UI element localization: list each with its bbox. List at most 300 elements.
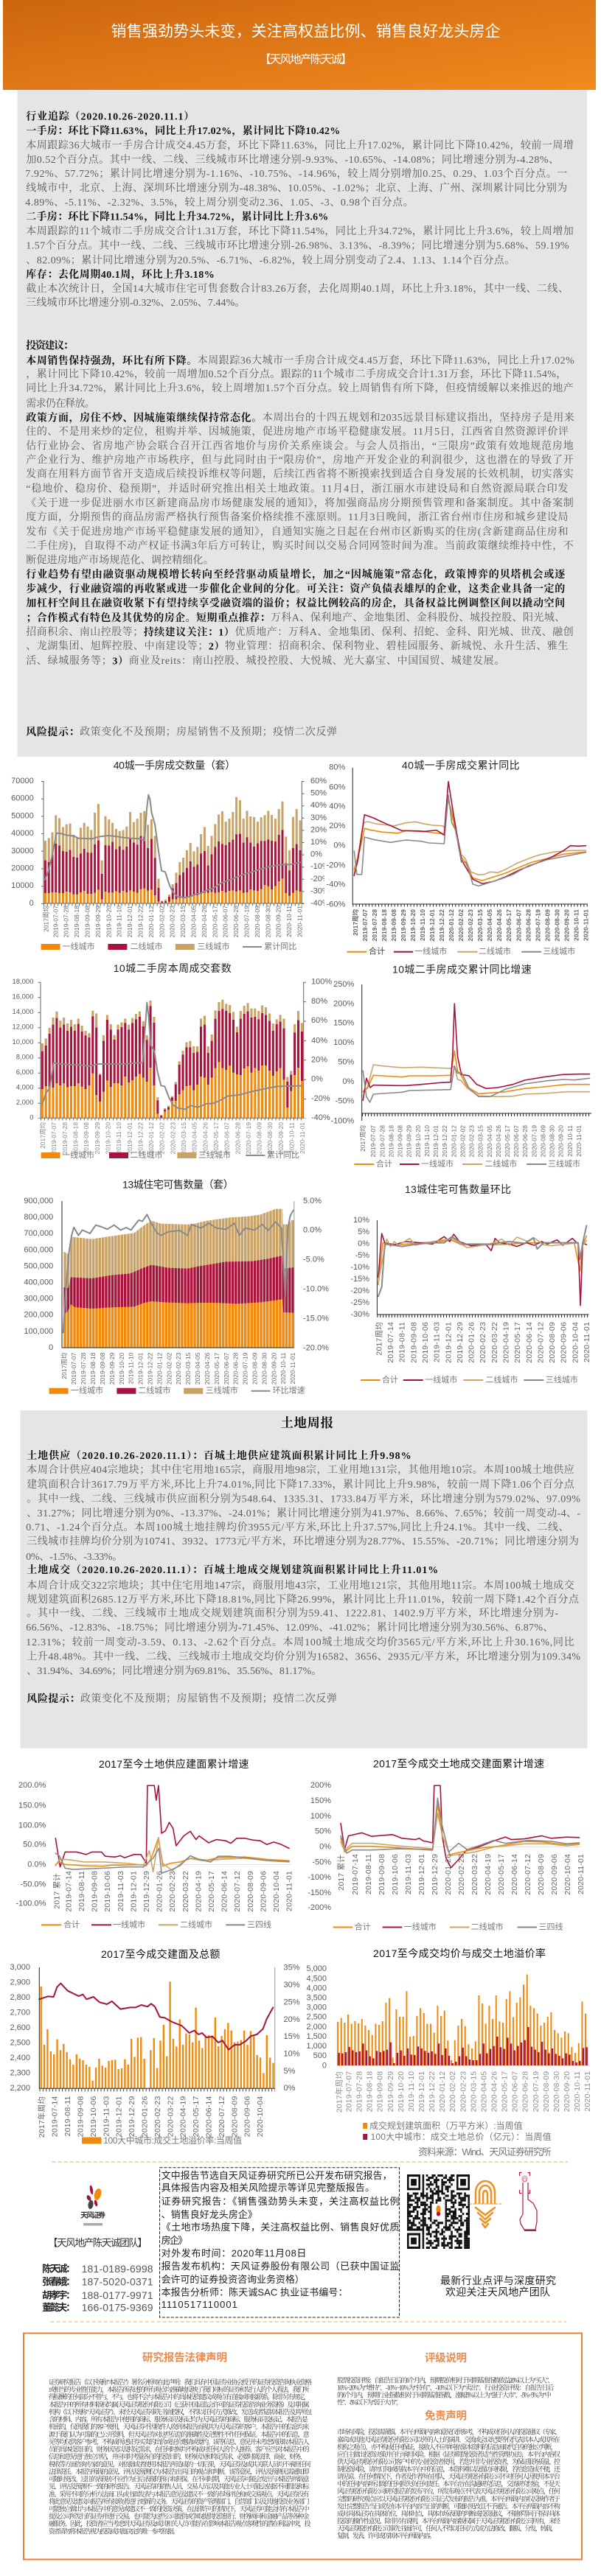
panel: legal statements	[24, 2333, 582, 2560]
axis labels: 70000	[11, 777, 34, 785]
legend: 环比增速	[273, 1385, 305, 1396]
x axis labels: 2020-08-30	[549, 1125, 556, 1157]
axis labels: 50.0%	[23, 1840, 46, 1849]
legend	[347, 946, 575, 956]
axis labels	[12, 977, 332, 1122]
x axis labels: 2019-07-14	[386, 1322, 395, 1363]
x axis labels: 2019-08-18	[387, 1125, 395, 1157]
axis labels: 14,000	[12, 1008, 34, 1016]
axis labels: 3,000	[10, 1963, 30, 1972]
x axis labels: 2020-08-09	[254, 906, 261, 937]
axis labels: 2,600	[10, 2023, 30, 2032]
text block: legal statement: 或相当的专业胜任能力，本报告所表述的所有观点均准确地反映了我们对标的证券和发行人的个人看法。我们所	[49, 2385, 310, 2394]
x axis labels: 2019-09-08	[91, 1871, 100, 1912]
x axis labels: 2020-09-20	[270, 1352, 277, 1385]
legend	[49, 1385, 305, 1396]
x axis labels: 2019-10-06	[391, 1854, 400, 1895]
lines	[341, 1785, 581, 1868]
x axis labels: 2019-08-11	[77, 1871, 86, 1911]
x axis labels: 2017周均	[42, 906, 49, 932]
text block: land supply	[26, 1449, 580, 1563]
logo: Tianfeng Securities: 天风证券	[80, 2211, 105, 2220]
x axis labels: 2020-02-23	[175, 1352, 182, 1385]
x axis labels: 2019-12-22	[438, 909, 445, 941]
x axis labels: 2020-08-09	[230, 2096, 239, 2137]
x axis labels: 2020-05-17	[513, 1322, 522, 1363]
axis labels: 18,000	[12, 978, 34, 986]
axis labels: 200.0%	[18, 1781, 46, 1790]
x axis labels: 2020-09-20	[563, 909, 570, 941]
x axis labels: 2019-09-08	[99, 1352, 106, 1385]
x axis labels: 2020-01-12	[448, 909, 455, 941]
axis labels: 10%	[310, 838, 327, 847]
paired bars	[337, 1975, 589, 2065]
axis labels: 700,000	[24, 1229, 53, 1238]
x axis labels: 2019-12-01	[417, 2071, 426, 2112]
x axis labels: 2020-03-15	[184, 1352, 192, 1385]
x axis labels: 2019-08-18	[89, 1352, 97, 1385]
x axis labels: 2019-07-14	[351, 1854, 360, 1895]
legend	[333, 1922, 563, 1932]
x axis labels: 2020-07-19	[243, 906, 251, 937]
axis labels: 300,000	[24, 1295, 53, 1303]
follow call-to-action: 最新行业点评与深度研究	[440, 2275, 556, 2286]
text block: land transactions: 66.56%、-12.83%、-18.75%；同比增速分别为-71.45%、12.09%、-41.02%；累计同比增速分别为30.56%、6.87%、	[26, 1621, 553, 1634]
x axis labels: 2019-09-29	[386, 2071, 395, 2112]
legend: 一线城市	[113, 1919, 145, 1929]
text block: land transactions: 上升48.48%。其中一线、二线、三线城市土地成交均价分别为16582、3656、2935元/平方米，环比增速分别为109.34%	[27, 1651, 580, 1662]
x axis labels: 2019-09-08	[83, 1122, 90, 1154]
x axis labels: 2020-08-30	[266, 1122, 274, 1154]
axis labels: 10%	[283, 2050, 300, 2059]
axis labels: 25%	[283, 1998, 300, 2007]
legend: 合计	[382, 1374, 398, 1385]
text block: legal statement: 可随时更改。过往的表现亦不应作为日后表现的预示和担保。在不同时期，天风证券可能会发出与本报告所载意	[49, 2474, 310, 2483]
text block: disclaimer: 中的任何内容所引致的任何损失负任何责任。本平台旨在沟通研究信息，交流研究经验，不是天	[337, 2479, 560, 2488]
text block: disclaimer: 完整的研究观点应以天风证券股份有限公司正式发布的报告为准。本平台所载内容仅反映作者于	[337, 2494, 560, 2502]
x axis labels: 2019-07-07	[345, 2071, 354, 2112]
axis labels: 30000	[11, 847, 34, 855]
x axis labels: 2020-02-23	[169, 1122, 176, 1154]
legend: 一线城市	[63, 941, 95, 951]
x axis labels: 2020-11-01	[296, 906, 304, 937]
axis labels: 20%	[329, 822, 346, 830]
inventory change line	[63, 1211, 293, 1332]
chart: land transaction cumulative growth	[308, 1758, 586, 1932]
legend	[41, 1149, 299, 1160]
text block: industry tracking: 线城市中，北京、上海、深圳环比增速分别为-48.38%、10.05%、-1.02%；北京、上海、广州、深圳累计同比分别为	[26, 181, 567, 195]
text block: investment advice: 政策方面，房住不炒、因城施策继续保持常态化。本周出台的十四五规划和2035远景目标建议指出，坚持房子是用来	[26, 411, 574, 424]
heading: rating explanation: 评级说明	[425, 2351, 467, 2365]
x axis labels: 2019-09-08	[378, 1854, 386, 1895]
axis labels: 0%	[342, 1077, 355, 1086]
x axis labels: 2019-09-08	[77, 2096, 86, 2137]
x axis labels: 2019-11-03	[433, 1322, 442, 1362]
legend: 二线城市	[479, 946, 511, 956]
x axis labels: 2020-05-17	[497, 1854, 506, 1895]
chart: 10 city resale cumulative growth	[331, 964, 591, 1169]
text block: disclaimer: 发出完整报告当日或发布本平台内容当日的判断，可随时更改且不予通告。本平台所载内容不构	[337, 2502, 560, 2510]
axis labels: 0%	[311, 1074, 323, 1083]
report disclosure box: 本报告分析师：陈天诚SAC 执业证书编号：	[161, 2287, 348, 2297]
x axis labels: 2020-09-20	[557, 1125, 565, 1157]
axis labels: 3,000	[306, 2003, 327, 2012]
text block: land transactions: 、31.94%、34.69%；同比增速分别为69.81%、35.56%、81.17%。	[27, 1665, 322, 1677]
chart title: 40城一手房成交数量（套）	[114, 759, 235, 771]
axis labels: -30%	[310, 886, 330, 895]
x axis labels: 2020-01-26	[156, 1871, 164, 1912]
heading: legal statement: 研究报告法律声明	[142, 2351, 227, 2365]
axis labels	[306, 1964, 327, 2070]
stacked bars	[44, 797, 302, 903]
x axis labels: 2020-04-05	[486, 1125, 493, 1157]
axis labels: -5%	[355, 1251, 369, 1260]
team contacts: 188-0177-9971	[82, 2289, 153, 2301]
x axis labels: 2020-06-07	[222, 906, 229, 937]
x axis labels: 2019-09-29	[94, 906, 102, 937]
x axis labels: 2019-08-18	[381, 909, 388, 941]
axis labels: 2,800	[10, 1993, 30, 2002]
x axis labels: 2020-10-11	[566, 1125, 574, 1157]
x axis labels: 2017周均	[60, 1353, 68, 1379]
text block: land supply: 。其中一线、二线、三线城市供应面积分别为548.64、1335.31、1733.84万平方米，环比增速分别为579.02%、97.09%	[27, 1493, 580, 1505]
x axis labels: 2019-12-22	[441, 1125, 448, 1157]
legend: 合计	[369, 946, 385, 956]
axis labels: 10%	[353, 1216, 369, 1225]
x axis labels: 2020-05-17	[501, 2071, 510, 2112]
x axis labels: 2019-08-18	[73, 906, 80, 937]
x axis labels: 2020-11-01	[583, 2071, 592, 2112]
axis labels: -50%	[336, 1097, 355, 1106]
x axis labels: 2020-11-01	[575, 1125, 583, 1157]
axis labels: 4,000	[16, 1084, 34, 1092]
axis labels: -100%	[331, 1116, 355, 1125]
axis labels: 20%	[310, 825, 327, 834]
x axis labels: 2020-09-06	[259, 1871, 268, 1912]
x axis labels: 2020-08-09	[548, 1322, 557, 1363]
chart title: 2017至今成交建面及总额	[101, 1948, 220, 1960]
axis labels: 200%	[310, 1781, 331, 1790]
axis labels: 100,000	[24, 1327, 53, 1336]
text block: legal statement: 源于我们认为可靠的已公开资料，但天风证券对这些信息的准确性及完整性不作任何保证。本报告中的信息、意	[49, 2430, 310, 2439]
team contacts: 张春娥：	[42, 2276, 75, 2287]
axis labels: 2,400	[10, 2054, 30, 2062]
x axis labels: 2019-07-28	[355, 2071, 364, 2112]
x axis labels	[336, 1854, 586, 1895]
x axis labels: 2020-01-26	[468, 1322, 476, 1363]
axis labels: 500,000	[24, 1261, 53, 1270]
axis labels: 80%	[329, 763, 346, 772]
x axis labels: 2020-04-26	[496, 909, 503, 941]
legend: 三四线	[247, 1919, 271, 1929]
team contacts: 陈天诚：	[42, 2264, 75, 2274]
axis labels: 2,200	[10, 2084, 30, 2093]
x axis labels: 2020-02-02	[159, 1122, 166, 1154]
legend: 累计同比	[264, 942, 296, 951]
x axis labels: 2020-08-09	[542, 2071, 551, 2112]
x axis labels: 2020-04-26	[204, 1352, 211, 1385]
x axis labels: 2020-04-19	[484, 1854, 493, 1895]
text block: legal statement: 含的材料、内容。所有本报告中使用的商标、服务标识及标记均为天风证券的商标、服务标识及标记。本报告是	[49, 2415, 308, 2423]
axis labels: 0	[322, 2061, 327, 2070]
x axis labels: 2020-11-01	[583, 909, 590, 941]
x axis labels: 2017年周均	[335, 2071, 344, 2113]
x axis labels: 2019-07-07	[52, 906, 59, 937]
bars	[40, 1981, 275, 2088]
x axis labels: 2020-04-26	[490, 2071, 498, 2112]
axis labels: -40%	[311, 1113, 330, 1122]
axis labels	[11, 777, 330, 908]
x axis labels: 2019-12-01	[126, 1122, 133, 1154]
axis labels: 50000	[11, 811, 34, 820]
text block: rating explanation: 的6个月内，预期行业指数相对于同期基准指数，涨幅5%以上为“强于大市”、-5%~5%为“中	[337, 2391, 552, 2400]
x axis labels: 2020-08-09	[256, 1122, 263, 1154]
x axis labels: 2020-06-14	[525, 1322, 534, 1363]
x axis labels: 2020-04-26	[495, 1125, 502, 1157]
x axis labels: 2019-10-06	[89, 2096, 98, 2137]
text block: disclaimer	[337, 2428, 561, 2540]
axis labels: 400,000	[24, 1278, 53, 1287]
x axis labels: 2019-10-20	[414, 1125, 422, 1157]
legend: 二线城市	[485, 1374, 518, 1385]
x axis labels: 2019-12-01	[428, 909, 436, 941]
x axis labels: 2020-09-06	[550, 1854, 559, 1895]
x axis labels: 2019-12-01	[417, 1854, 426, 1895]
legend: 三四线	[538, 1922, 563, 1932]
x axis labels: 2020-10-04	[272, 1871, 281, 1912]
text block: land supply: 、31.27%；同比增速分别为0%、-13.37%、-24.01%；累计同比增速分别为41.97%、8.66%、7.65%；较前一周变动-4、-	[27, 1507, 580, 1519]
axis labels: 12,000	[12, 1023, 34, 1032]
cumulative line	[42, 1003, 302, 1109]
x axis labels: 2020-03-15	[476, 909, 484, 941]
axis labels	[327, 763, 346, 909]
x axis labels: 2020-06-28	[232, 1352, 240, 1385]
report disclosure box: 会许可的证券投资咨询业务资格）	[161, 2274, 305, 2285]
icon: hand pressing	[519, 2172, 537, 2230]
axis labels: 20%	[283, 2015, 300, 2024]
header banner: 销售强劲势头未变，关注高权益比例、销售良好龙头房企	[111, 24, 501, 40]
x axis labels: 2020-06-07	[511, 2071, 520, 2112]
x axis labels: 2020-05-17	[505, 909, 513, 941]
axis labels: 0.0%	[27, 1860, 46, 1869]
x axis labels: 2020-08-30	[552, 2071, 561, 2112]
x axis labels: 2020-10-11	[285, 906, 293, 937]
legend: 三线城市	[197, 941, 229, 951]
axis labels: 250%	[333, 980, 355, 989]
chart title: 10城二手房本周成交套数	[114, 962, 232, 974]
x axis labels: 2020-06-28	[521, 1125, 529, 1157]
panel: industry tracking and investment advice	[17, 90, 587, 757]
chart: average price and land value	[306, 1947, 592, 2142]
x axis labels: 2020-08-30	[260, 1352, 268, 1385]
text block: disclaimer: 制投资风险，请勿订阅或转载本平台中的信息，本资料难以设置访问权限，若给您造成不便，还	[337, 2465, 561, 2474]
x axis labels: 2020-10-11	[572, 909, 580, 941]
axis labels: -50%	[312, 1858, 331, 1866]
lines	[55, 1785, 291, 1873]
text block: investment advice: ；合作模式有特色及其优势的房企。短期重点推荐：万科A、保利地产、金地集团、金科股份、城投控股、阳光城、	[26, 612, 565, 623]
axis labels: -20%	[310, 875, 330, 883]
x axis labels: 2019-07-07	[369, 1125, 377, 1157]
text block: industry tracking: 截止本次统计日，全国14大城市住宅可售套数合计83.26万套，去化周期40.1周，环比上升3.18%，其中一线、二线、	[26, 282, 569, 295]
axis labels: 50%	[310, 789, 327, 798]
x axis labels: 2020-05-17	[213, 1352, 220, 1385]
x axis labels: 2019-11-03	[117, 1871, 125, 1911]
text block: rating explanation	[337, 2376, 554, 2407]
x axis labels: 2019-12-22	[137, 906, 145, 937]
text block: disclaimer: 应自主做出投资决策并自行承担风险。根据《证券期货投资者适当性管理办法》，本平台内容仅	[337, 2450, 560, 2459]
x axis labels: 2020-08-09	[540, 1125, 547, 1157]
x axis labels: 2020-11-01	[285, 1871, 294, 1911]
report disclosure box: 对外发布时间：2020年11月08日	[161, 2247, 306, 2259]
axis labels: -20%	[327, 861, 346, 869]
text block: investment advice: 步减少，行业融资端的再收紧或进一步催化企业间的分化。可关注：资产负债表雄厚的企业，这类企业具备一定的	[26, 582, 565, 595]
x axis labels: 2020-01-12	[147, 906, 155, 937]
x axis labels: 2019-12-22	[136, 1122, 144, 1154]
x axis labels: 2017周均	[375, 1322, 383, 1356]
chart title: 40城一手房成交累计同比	[402, 760, 520, 771]
legend: 合计	[376, 1158, 392, 1169]
axis labels: -200%	[308, 1903, 331, 1912]
x axis labels: 2019-10-20	[118, 1352, 125, 1385]
text block: industry tracking: 行业追踪（2020.10.26-2020.11.1）	[26, 111, 194, 122]
x axis labels: 2019-07-14	[64, 1871, 73, 1912]
text block: legal statement: 得报酬的任何部分不曾与，不与，也将不会与本报告中的具体投资建议或观点有直接或间接联系。除非另有规定，	[49, 2393, 310, 2401]
axis labels: 5%	[283, 2067, 296, 2076]
report disclosure box: 具体报告内容及相关风险提示等详见完整版报告。	[161, 2183, 375, 2193]
report disclosure box: 1110517110001	[161, 2299, 237, 2310]
text block: land supply: 0%、-1.5%、-3.33%。	[26, 1552, 122, 1563]
x axis labels: 2020-07-19	[245, 1122, 252, 1154]
chart title: 2017至今土地供应建面累计增速	[99, 1758, 249, 1770]
legend: 累计同比	[267, 1150, 299, 1160]
axis labels: 10000	[11, 881, 34, 890]
x axis labels: 2019-10-20	[105, 906, 112, 937]
text block: industry tracking: 本周跟踪36大城市一手房合计成交4.45万套，环比下降11.63%，同比上升17.02%，累计同比下降10.42%，较前一周增	[26, 139, 574, 152]
axis labels: 500	[313, 2051, 327, 2060]
x axis labels: 2020-01-12	[450, 1125, 457, 1157]
axis labels: 2,000	[306, 2023, 327, 2031]
axis labels: 40%	[310, 801, 327, 810]
x axis labels: 2020-09-20	[563, 2071, 572, 2112]
text block: industry tracking: 本周跟踪的11个城市二手房成交合计1.31万套，环比下降11.54%，同比上升34.72%，累计同比上升3.6%，较上周增加	[26, 225, 574, 237]
axis labels: -15.0%	[303, 1315, 329, 1323]
axis labels	[331, 980, 355, 1125]
x axis labels: 2020-01-26	[444, 1854, 453, 1895]
x axis labels: 2020-03-15	[180, 1122, 187, 1154]
x axis labels: 2020-11-01	[577, 1854, 586, 1894]
text block: disclaimer: 市场有风险，投资需谨慎。本平台所载内容和意见仅供参考，不构成对任何人的投资建议（专家、	[337, 2428, 561, 2437]
text block: investment advice: 行业趋势有望由融资驱动规模增长转向至经营驱动质量增长，加之“因城施策”常态化，政策博弈的贝塔机会或逐	[26, 568, 566, 581]
text block: investment advice: 同比上升34.72%，累计同比上升3.6%，较上周增加1.57个百分点。较上周销售有所下降，但疫情缓解以来推迟的地产	[26, 382, 574, 394]
report disclosure box	[159, 2168, 400, 2317]
legend: 成交规划建筑面积（万平方米）:当周值	[369, 2120, 523, 2131]
text block: risk warning: 风险提示：政策变化不及预期；房屋销售不及预期；疫情二次反弹	[26, 725, 337, 738]
legend	[354, 1158, 580, 1169]
axis labels: 6,000	[16, 1068, 34, 1077]
x axis labels: 2020-09-06	[560, 1322, 569, 1363]
axis labels: 0%	[333, 841, 346, 850]
text block: land supply: 建筑面积合计3617.79万平方米,环比上升74.01%,同比下降17.33%，累计同比上升9.98%，较前一周下降1.06个百分点	[27, 1478, 575, 1491]
x axis labels: 2020-07-19	[530, 1125, 538, 1157]
x axis labels: 2020-06-28	[234, 1122, 241, 1154]
axis labels: -10.0%	[303, 1285, 329, 1294]
axis labels	[308, 1781, 331, 1912]
x axis labels	[37, 2096, 265, 2138]
QR code	[407, 2174, 470, 2249]
text block: disclaimer: 投资的操作性意见。除非另有说明，本平台所载内容版权属于天风证券股份有限公司所有，未经	[337, 2517, 560, 2526]
x axis labels: 2020-04-05	[194, 1352, 201, 1385]
axis labels: 800,000	[24, 1213, 53, 1222]
text block: investment advice: 投资建议：	[26, 339, 74, 352]
axis labels: 150.0%	[18, 1801, 46, 1810]
chart title: 10城二手房成交累计同比增速	[392, 964, 532, 976]
heading: disclaimer: 免责声明	[425, 2409, 467, 2422]
axis labels: 15%	[283, 2032, 300, 2041]
x axis labels: 2020-03-15	[179, 906, 187, 937]
x axis labels: 2019-07-28	[378, 1125, 386, 1157]
axis labels: 40%	[329, 802, 346, 811]
x axis labels: 2020-08-09	[251, 1352, 258, 1385]
text block: land supply: 土地供应（2020.10.26-2020.11.1）：百城土地供应建筑面积累计同比上升9.98%	[27, 1449, 411, 1462]
axis labels: 0	[49, 1343, 53, 1352]
team contacts: 166-0175-9369	[82, 2302, 153, 2314]
team contacts	[42, 2237, 153, 2314]
report disclosure box: 报告发布机构：天风证券股份有限公司（已获中国证监	[161, 2261, 400, 2272]
x axis labels: 2017周均	[39, 1122, 46, 1149]
x axis labels: 2020-04-19	[501, 1322, 510, 1363]
text block: investment advice: ，累计同比下降10.42%，较前一周增加0.52个百分点。跟踪的11个城市二手房成交合计1.31万套，环比下降11.54%，	[26, 368, 566, 380]
axis labels: 10,000	[12, 1038, 34, 1046]
x axis labels	[39, 1122, 306, 1154]
lines	[354, 782, 586, 886]
x axis labels: 2020-01-26	[140, 2096, 149, 2137]
axis labels: -50.0%	[20, 1880, 46, 1889]
legend: 一线城市	[414, 946, 447, 956]
axis labels: 40%	[311, 1036, 327, 1045]
x axis labels: 2019-10-06	[421, 1322, 430, 1363]
text block: industry tracking: 三线城市环比增速分别-0.32%、2.05%、7.44%。	[26, 296, 245, 309]
x axis labels	[335, 2071, 592, 2113]
text block: investment advice: 发布《关于促进房地产市场平稳健康发展的通知》，自通知实施之日起在台州市区新购买的住房(含新建商品住房和	[26, 525, 569, 538]
follow call-to-action: 欢迎关注天风地产团队	[445, 2286, 550, 2298]
report disclosure box: 、销售良好龙头房企》	[161, 2209, 257, 2220]
text block: legal statement: 资者请勿将本报告视为投资或其他决定的唯一参考依据。	[49, 2527, 179, 2535]
x axis labels: 2020-07-19	[242, 1352, 249, 1385]
x axis labels: 2017 累计	[52, 1873, 61, 1909]
x axis labels: 2020-07-12	[218, 2096, 226, 2137]
x axis labels: 2020-06-07	[513, 1125, 520, 1157]
x axis labels: 2020-07-12	[536, 1322, 545, 1363]
text block: legal statement: 信息和意见进行独立评估，并应同时考量各自的投资目的、财务状况和特定需求，必要时就法律、商业、财务、	[49, 2452, 306, 2461]
axis labels: 2,300	[10, 2069, 30, 2078]
axis labels: 20000	[11, 864, 34, 872]
legend: 合计	[355, 1922, 371, 1932]
text block: risk warning: 风险提示：政策变化不及预期；房屋销售不及预期；疫情二次反弹	[27, 1692, 337, 1705]
text block: legal statement: 证券研究报告（以下统称“本报告”）署名分析师在此声明：我们具有中国证券业协会授予的证券投资咨询执业资格	[49, 2378, 312, 2386]
text block: rating explanation: 性”、-5%以下为“弱于大市”。	[337, 2398, 403, 2407]
legend: 二线城市	[130, 1149, 162, 1160]
axis labels: -100%	[308, 1873, 331, 1882]
text block: rating explanation: 10%~20%为“增持”、-10%~10%为“持有”、-10%以下为“卖出”。行业投资评级：自报告日后	[337, 2384, 554, 2392]
x axis labels: 2020-02-23	[468, 1125, 475, 1157]
x axis labels: 2020-08-30	[264, 906, 271, 937]
text block: disclaimer: 风证券股份有限公司研究报告的发布平台，所发布观点不代表天风证券股份有限公司观点，任何	[337, 2487, 560, 2496]
x axis labels: 2020-02-02	[459, 1125, 466, 1157]
x axis labels: 2020-02-23	[168, 1871, 177, 1912]
x axis labels	[42, 906, 304, 937]
axis labels: 5%	[358, 1228, 369, 1236]
x axis labels: 2019-07-28	[63, 906, 70, 937]
